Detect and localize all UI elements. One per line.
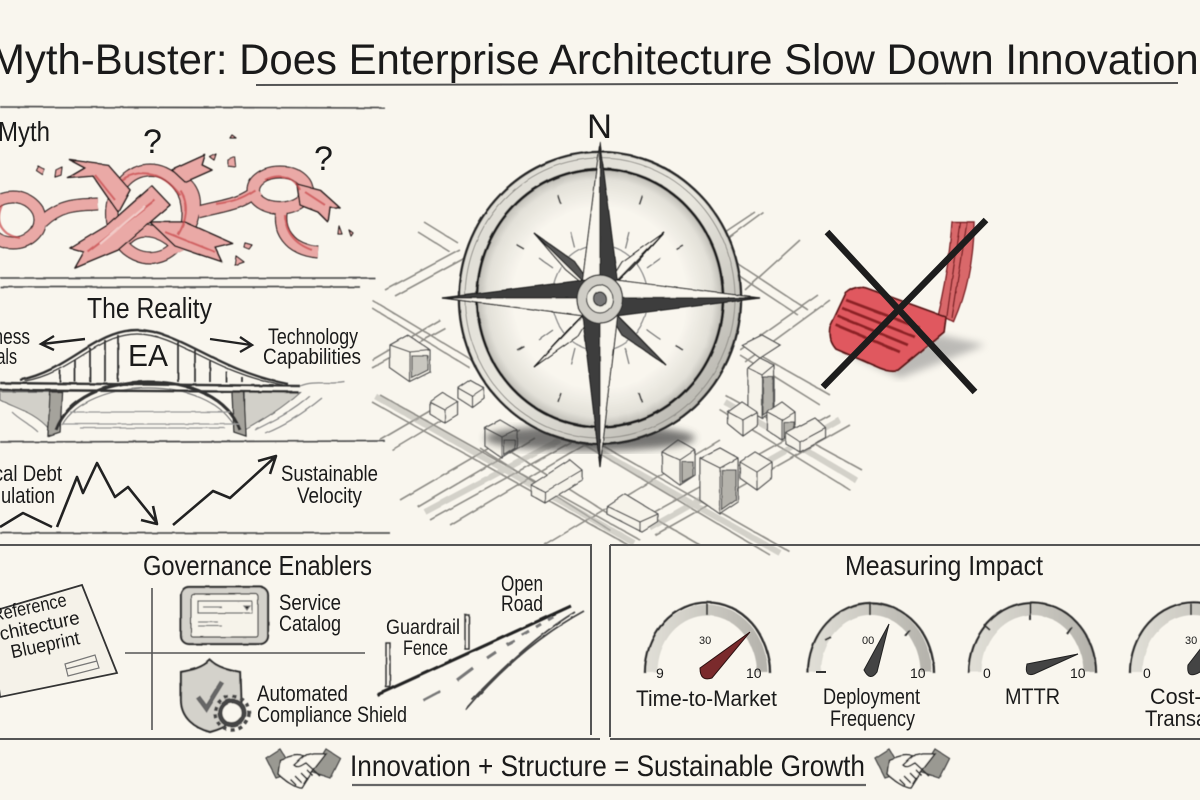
heading: N: N (587, 108, 612, 146)
blueprint paper (0, 585, 117, 697)
red brake pedal (830, 222, 974, 371)
gauge: MTTR: 10 (1070, 665, 1086, 681)
icon: compliance shield with gear (181, 660, 249, 732)
ground shadow (485, 425, 695, 451)
label: technology capabilities: Capabilities (263, 344, 361, 369)
label: automated compliance shield: Compliance Shield (257, 702, 407, 727)
gauge: deployment frequency: Deployment (823, 684, 920, 709)
arrow: to technology capabilities (210, 337, 252, 352)
black X (823, 220, 986, 392)
label: service catalog: Catalog (279, 611, 341, 636)
heading: governance enablers: Governance Enablers (143, 550, 372, 581)
label: technology capabilities (263, 324, 361, 369)
label: automated compliance shield (257, 681, 407, 727)
label: guardrail fence: Fence (403, 637, 448, 660)
panel: the myth (0, 116, 353, 268)
gauge: MTTR: 0 (983, 665, 991, 681)
label: technology capabilities: Technology (268, 324, 358, 349)
label: guardrail fence: Guardrail (386, 616, 460, 639)
city map (372, 212, 862, 555)
label: service catalog: Service (279, 590, 341, 615)
tagline underline (352, 784, 866, 786)
label: service catalog (279, 590, 341, 636)
gauge: cost-per-transaction: 0 (1143, 665, 1151, 681)
gauge: deployment frequency: 10 (910, 665, 926, 681)
crossed-out brake pedal (823, 220, 986, 392)
label: open road: Open (501, 571, 543, 596)
icon: service catalog tablet (181, 587, 268, 644)
label: open road: Road (501, 591, 543, 616)
label: EA: EA (128, 338, 168, 373)
panel frame (610, 545, 1200, 739)
gauge: cost-per-transaction: 30 (1185, 635, 1197, 647)
gauge: MTTR: MTTR (1005, 684, 1060, 709)
gauge: MTTR (969, 603, 1096, 709)
section rules (0, 107, 390, 533)
buildings (390, 335, 826, 532)
compass rose (442, 142, 760, 467)
blueprint paper: Blueprint (9, 628, 82, 663)
streets (372, 212, 862, 555)
ribbon fragments (36, 135, 353, 265)
tagline text: Innovation + Structure = Sustainable Growth (350, 750, 865, 783)
label: sustainable velocity: Velocity (297, 483, 362, 508)
label: open road (501, 571, 543, 616)
panel: debt versus velocity (0, 456, 378, 527)
open road with guardrail (377, 606, 584, 710)
label: technical debt accumulation (0, 461, 62, 508)
dividers (125, 588, 365, 730)
label: sustainable velocity (281, 461, 378, 508)
gauge: time-to-market: 10 (746, 665, 762, 681)
gauge: deployment frequency: Frequency (830, 706, 915, 731)
heading: The Reality: The Reality (87, 293, 212, 325)
label: automated compliance shield: Automated (257, 681, 348, 706)
icon: left handshake (266, 749, 340, 788)
panel frame (0, 545, 600, 739)
gauge: deployment frequency (808, 603, 934, 731)
gauge: time-to-market: Time-to-Market (636, 686, 777, 711)
bridge illustration (0, 330, 345, 436)
gauge: time-to-market (636, 602, 777, 711)
tagline (266, 749, 949, 788)
gauge: cost-per-transaction (1130, 602, 1200, 731)
tangled red ribbon (0, 135, 353, 268)
arrow: to business goals (41, 336, 85, 350)
question marks: ? (143, 123, 162, 161)
gauge: deployment frequency: 00 (862, 635, 874, 647)
heading: measuring impact: Measuring Impact (845, 550, 1043, 581)
gauge: time-to-market: 30 (699, 635, 711, 647)
compass ring (459, 152, 741, 444)
gauge: time-to-market: 9 (656, 665, 664, 681)
label: sustainable velocity: Sustainable (281, 461, 378, 486)
panel: governance enablers (0, 545, 600, 739)
chart: falling jagged line (0, 463, 157, 527)
compass (442, 108, 760, 467)
label: business goals (0, 324, 30, 369)
pedal shadow (840, 335, 985, 378)
icon: right handshake (875, 749, 949, 788)
label: guardrail fence (386, 616, 460, 660)
panel: measuring impact (610, 545, 1200, 739)
panel: the reality (0, 293, 361, 436)
chart: rising jagged arrow (173, 456, 276, 525)
panel: the myth: ? (314, 140, 333, 178)
shaded road bands (375, 396, 856, 553)
